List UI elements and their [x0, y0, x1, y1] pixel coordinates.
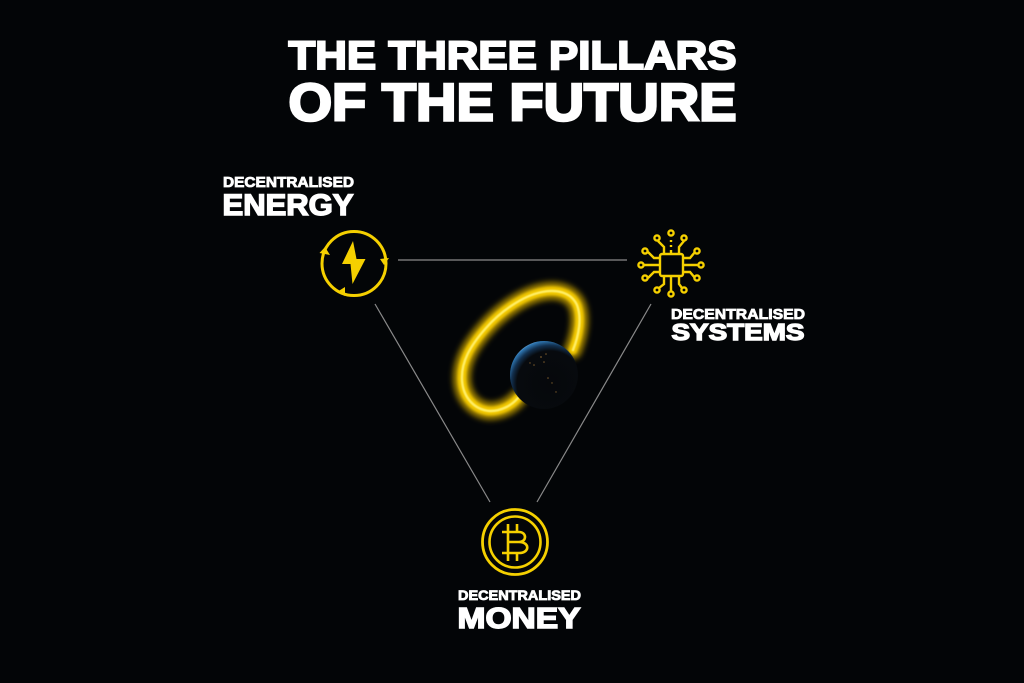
energy label — [222, 175, 354, 222]
icon: circuit chip — [638, 230, 704, 297]
money label: MONEY — [458, 603, 580, 635]
title: OF THE FUTURE — [288, 74, 736, 132]
systems label: DECENTRALISED — [671, 307, 805, 323]
title — [288, 34, 736, 132]
central illustration: earth with glowing ring — [462, 291, 580, 411]
group: decentralised money — [458, 510, 581, 635]
glowing ring — [462, 291, 580, 411]
systems label — [671, 307, 805, 345]
title: THE THREE PILLARS — [288, 34, 736, 78]
group: decentralised energy — [222, 175, 389, 296]
energy label: DECENTRALISED — [223, 175, 354, 191]
systems label: SYSTEMS — [672, 319, 804, 345]
group: decentralised systems — [638, 230, 805, 345]
money label — [458, 588, 581, 635]
earth — [510, 341, 578, 409]
energy label: ENERGY — [222, 189, 354, 222]
money label: DECENTRALISED — [458, 588, 581, 603]
triangle connector lines — [375, 260, 651, 502]
icon: bitcoin coin — [482, 510, 548, 574]
icon: lightning bolt in circular arrows — [320, 232, 389, 296]
